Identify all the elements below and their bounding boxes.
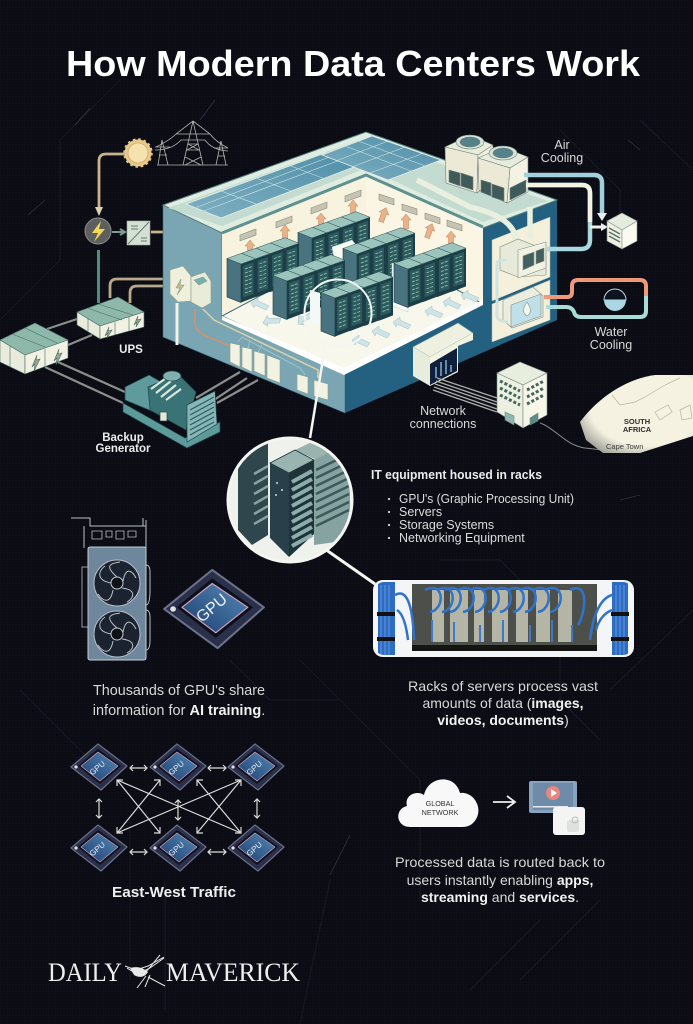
- water chiller unit: [503, 287, 543, 328]
- icon: sun: [124, 140, 152, 166]
- fibre cables: [433, 378, 497, 412]
- photo: server rack cabling: [373, 580, 634, 657]
- pipes: chillers to indoor unit: [417, 180, 530, 240]
- rack row 6: [394, 243, 466, 308]
- cooling systems: [524, 138, 646, 352]
- chiller unit 2: [478, 146, 528, 203]
- arrow: into switch: [95, 207, 103, 216]
- logo: Daily Maverick: MAVERICK: [166, 958, 300, 987]
- traffic arrows: [96, 765, 260, 855]
- network entry tunnel: [413, 323, 473, 386]
- network connection: [410, 362, 693, 453]
- backup generator: [123, 371, 220, 448]
- GPU chip grid: GPU: [245, 840, 264, 858]
- title: How Modern Data Centers Work: [66, 43, 641, 84]
- global network delivery: [395, 779, 605, 905]
- Water Cooling label: Water: [595, 325, 627, 339]
- icon: outdoor unit: [607, 213, 637, 249]
- icon: water tank: [604, 289, 626, 311]
- back wall left: [222, 175, 366, 316]
- logo: Daily Maverick: [48, 955, 300, 988]
- Backup Generator label: Backup: [102, 432, 144, 444]
- arrow: network to devices: [493, 796, 515, 808]
- connector line: zoom circle to photo: [302, 533, 375, 584]
- caption: server racks: amounts of data (images,: [422, 695, 584, 711]
- icon: cloud: GLOBAL: [426, 799, 454, 808]
- wall top trim: [222, 175, 483, 233]
- zoom circle: racks close-up: [228, 438, 352, 565]
- arrow heads: [597, 213, 608, 231]
- control panel: [191, 272, 211, 308]
- solar panel left: [186, 153, 359, 218]
- rack row 4: [343, 228, 415, 292]
- caption: processed data: users instantly enabling apps,: [407, 872, 593, 888]
- front rack: [270, 450, 314, 557]
- roof: [163, 132, 557, 233]
- pipe: chiller return: [497, 260, 508, 322]
- electrical panel: [170, 266, 191, 302]
- map: South Africa: AFRICA: [623, 425, 652, 434]
- low voltage breakers: [230, 343, 328, 400]
- power supply system: [0, 121, 258, 455]
- pipe: inverter to panel: [151, 232, 184, 255]
- map: South Africa: SOUTH: [624, 417, 650, 426]
- left facade: [163, 205, 345, 413]
- floor airflow arrows: [251, 290, 479, 347]
- icon: streaming devices: [529, 781, 585, 835]
- cable to Cape Town: [540, 423, 603, 450]
- arrow: switch to inverter: [112, 229, 125, 235]
- water cooling loop: [544, 280, 646, 317]
- facade white conduit: [176, 303, 178, 345]
- east-west traffic diagram: [71, 744, 284, 901]
- Backup Generator label: Generator: [96, 443, 151, 455]
- text block: IT equipment: IT equipment housed in racks: [371, 468, 542, 482]
- Air Cooling label: Air: [554, 138, 570, 152]
- floor front band: [222, 300, 483, 375]
- Backup Generator label: [96, 432, 151, 455]
- Air Cooling label: [541, 138, 583, 165]
- icon: GPU chip large: GPU: [193, 591, 231, 626]
- GPU chip grid: GPU: [245, 759, 264, 777]
- text block: IT equipment: Networking Equipment: [399, 531, 525, 545]
- pipes: panel to breakers: [195, 309, 232, 347]
- caption: server racks: Racks of servers process vast: [408, 678, 598, 694]
- cream panel lower right: [492, 280, 550, 342]
- caption: GPU training: information for AI training.: [93, 703, 265, 719]
- back right rack: [295, 438, 352, 545]
- caption: server racks: [408, 678, 598, 728]
- text block: IT equipment: Storage Systems: [399, 518, 494, 532]
- left rack: [238, 442, 268, 545]
- pipes: UPS to panel: [110, 279, 170, 303]
- Network connections label: connections: [410, 417, 476, 431]
- icon: inverter: [127, 221, 150, 245]
- data center building: [163, 132, 557, 413]
- orange heat arrows: [245, 200, 456, 255]
- Air Cooling label: Cooling: [541, 151, 583, 165]
- rack row 1: [227, 238, 299, 302]
- caption: processed data: [395, 854, 605, 905]
- icon: GPU chip large: [164, 570, 264, 648]
- caption: GPU training: Thousands of GPU's share: [93, 683, 265, 699]
- Network connections label: Network: [420, 404, 467, 418]
- chiller unit 1: [445, 135, 493, 193]
- spare battery block: [0, 323, 68, 374]
- caption: server racks: videos, documents): [437, 712, 569, 728]
- icon: logo bird: [125, 955, 165, 988]
- rack row 5 and zoom ring: [304, 272, 393, 346]
- Water Cooling label: Cooling: [590, 338, 632, 352]
- caption: GPU training: [93, 683, 265, 719]
- back wall right: [366, 175, 483, 304]
- text block: IT equipment: Servers: [399, 505, 442, 519]
- connectors: batteries and generator: [45, 319, 258, 406]
- icon: GPU card: [71, 518, 150, 660]
- tan feed line: [203, 309, 318, 378]
- GPU chip grid: [71, 744, 284, 871]
- text block: IT equipment: GPU's (Graphic Processing Unit): [399, 492, 574, 506]
- right facade: [345, 200, 557, 413]
- indoor air handler: [500, 239, 546, 278]
- pipe: sun to inverter: [99, 154, 125, 207]
- GPU chip grid: GPU: [167, 840, 186, 858]
- rack row 2: [298, 212, 370, 276]
- room floor: [222, 240, 483, 372]
- rack row 3: [273, 255, 345, 320]
- white containment wall: [332, 240, 360, 290]
- logo: Daily Maverick: DAILY: [48, 958, 122, 987]
- breaker feed lines: [238, 337, 305, 375]
- cream panel upper right: [492, 217, 550, 301]
- Water Cooling label: [590, 325, 632, 352]
- arrow: into panel: [180, 255, 188, 263]
- air cooling pipes: [524, 175, 602, 249]
- East-West Traffic label: East-West Traffic: [112, 885, 236, 901]
- UPS battery block: [77, 297, 144, 339]
- solar panel right: [322, 136, 441, 180]
- icon: cloud: [398, 779, 478, 827]
- Network connections label: [410, 404, 476, 431]
- icon: power switch: [85, 218, 111, 244]
- office building: [497, 362, 547, 428]
- white containment wall right: [392, 263, 408, 312]
- caption: processed data: Processed data is routed back to: [395, 854, 605, 870]
- GPU chip grid: GPU: [167, 759, 186, 777]
- text block: IT equipment: [371, 468, 574, 545]
- UPS label: UPS: [119, 344, 143, 356]
- vents: [240, 190, 462, 241]
- map: South Africa: Cape Town: [606, 442, 643, 451]
- icon: transmission pylons: [155, 121, 228, 165]
- line: switch to UPS: [97, 250, 100, 303]
- icon: cloud: NETWORK: [422, 808, 459, 817]
- map: South Africa: [580, 375, 693, 453]
- connector line: building to zoom circle: [310, 347, 325, 438]
- GPU chip grid: GPU: [88, 759, 107, 777]
- caption: processed data: streaming and services.: [421, 889, 579, 905]
- GPU chip grid: GPU: [88, 840, 107, 858]
